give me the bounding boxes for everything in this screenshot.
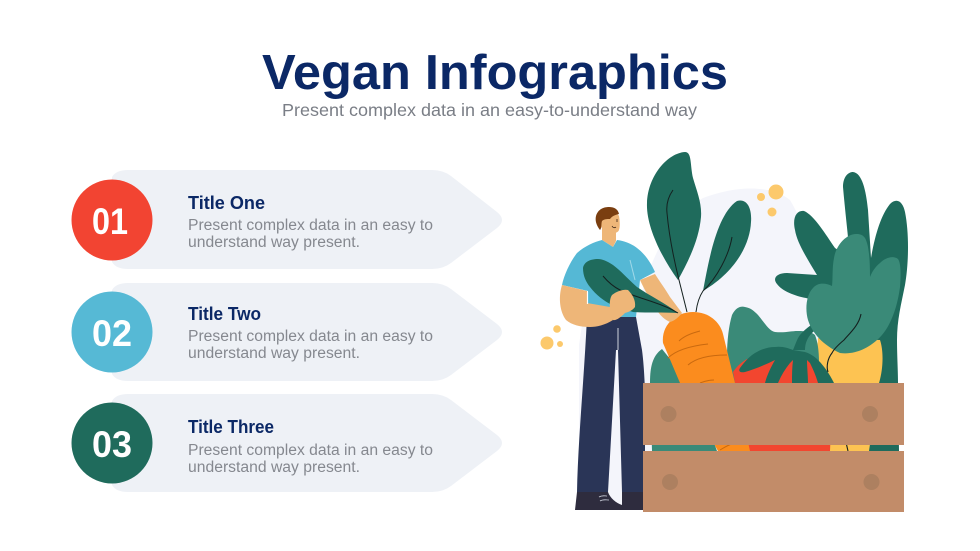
tomato calyx <box>739 320 834 383</box>
description two: Present complex data in an easy to <box>188 328 433 345</box>
lower plank <box>643 451 904 512</box>
near arm <box>560 285 613 327</box>
wooden crate <box>643 383 904 512</box>
description three: Present complex data in an easy to <box>188 442 433 459</box>
number badge two: 02 <box>92 313 132 354</box>
white strip by arm <box>586 292 588 304</box>
shoe laces <box>599 496 609 501</box>
number badge two <box>72 292 152 372</box>
subtitle: Present complex data in an easy-to-understand way <box>282 100 697 120</box>
held leaf <box>583 259 678 313</box>
face <box>601 213 620 233</box>
arrow banner two <box>112 283 502 381</box>
neck <box>602 228 616 247</box>
shoes <box>575 492 645 510</box>
panel: item one <box>72 170 502 269</box>
number badge three <box>72 402 152 484</box>
carrot <box>663 312 750 451</box>
shirt <box>562 240 655 317</box>
trousers <box>577 317 645 492</box>
illustration: person with vegetable crate <box>540 152 908 512</box>
yellow squash <box>815 338 883 451</box>
background blob <box>579 188 824 510</box>
heading three: Title Three <box>188 417 274 437</box>
number badge one: 01 <box>92 201 128 242</box>
hand <box>610 290 635 320</box>
shirt crease <box>630 260 635 280</box>
calyx sepals <box>739 347 834 383</box>
hair <box>596 207 619 230</box>
heading two: Title Two <box>188 304 261 324</box>
face details <box>612 219 617 228</box>
panel: item two <box>72 283 502 381</box>
description one: understand way present. <box>188 234 360 251</box>
description one: Present complex data in an easy to <box>188 217 433 234</box>
calyx stem <box>793 320 825 350</box>
description two: understand way present. <box>188 345 360 362</box>
heading one: Title One <box>188 193 265 213</box>
tomato <box>733 352 833 451</box>
right upright leaf <box>696 201 751 312</box>
arrow banner one <box>112 170 502 269</box>
number badge three: 03 <box>92 424 132 465</box>
title: Vegan Infographics <box>262 46 728 100</box>
far arm <box>640 274 682 322</box>
large upright leaf <box>647 152 701 312</box>
number badge one <box>72 180 152 260</box>
upper plank <box>643 383 904 445</box>
person <box>560 207 682 510</box>
teal bush <box>727 307 819 383</box>
panel: item three <box>72 394 502 492</box>
decorative yellow dots <box>540 184 784 350</box>
description three: understand way present. <box>188 459 360 476</box>
front teal leaf <box>806 234 901 451</box>
arrow banner three <box>112 394 502 492</box>
trouser crease <box>617 328 619 350</box>
tall dark leaves at right <box>775 172 908 451</box>
teal leaf behind carrot <box>650 349 717 451</box>
crate screws <box>660 406 880 490</box>
